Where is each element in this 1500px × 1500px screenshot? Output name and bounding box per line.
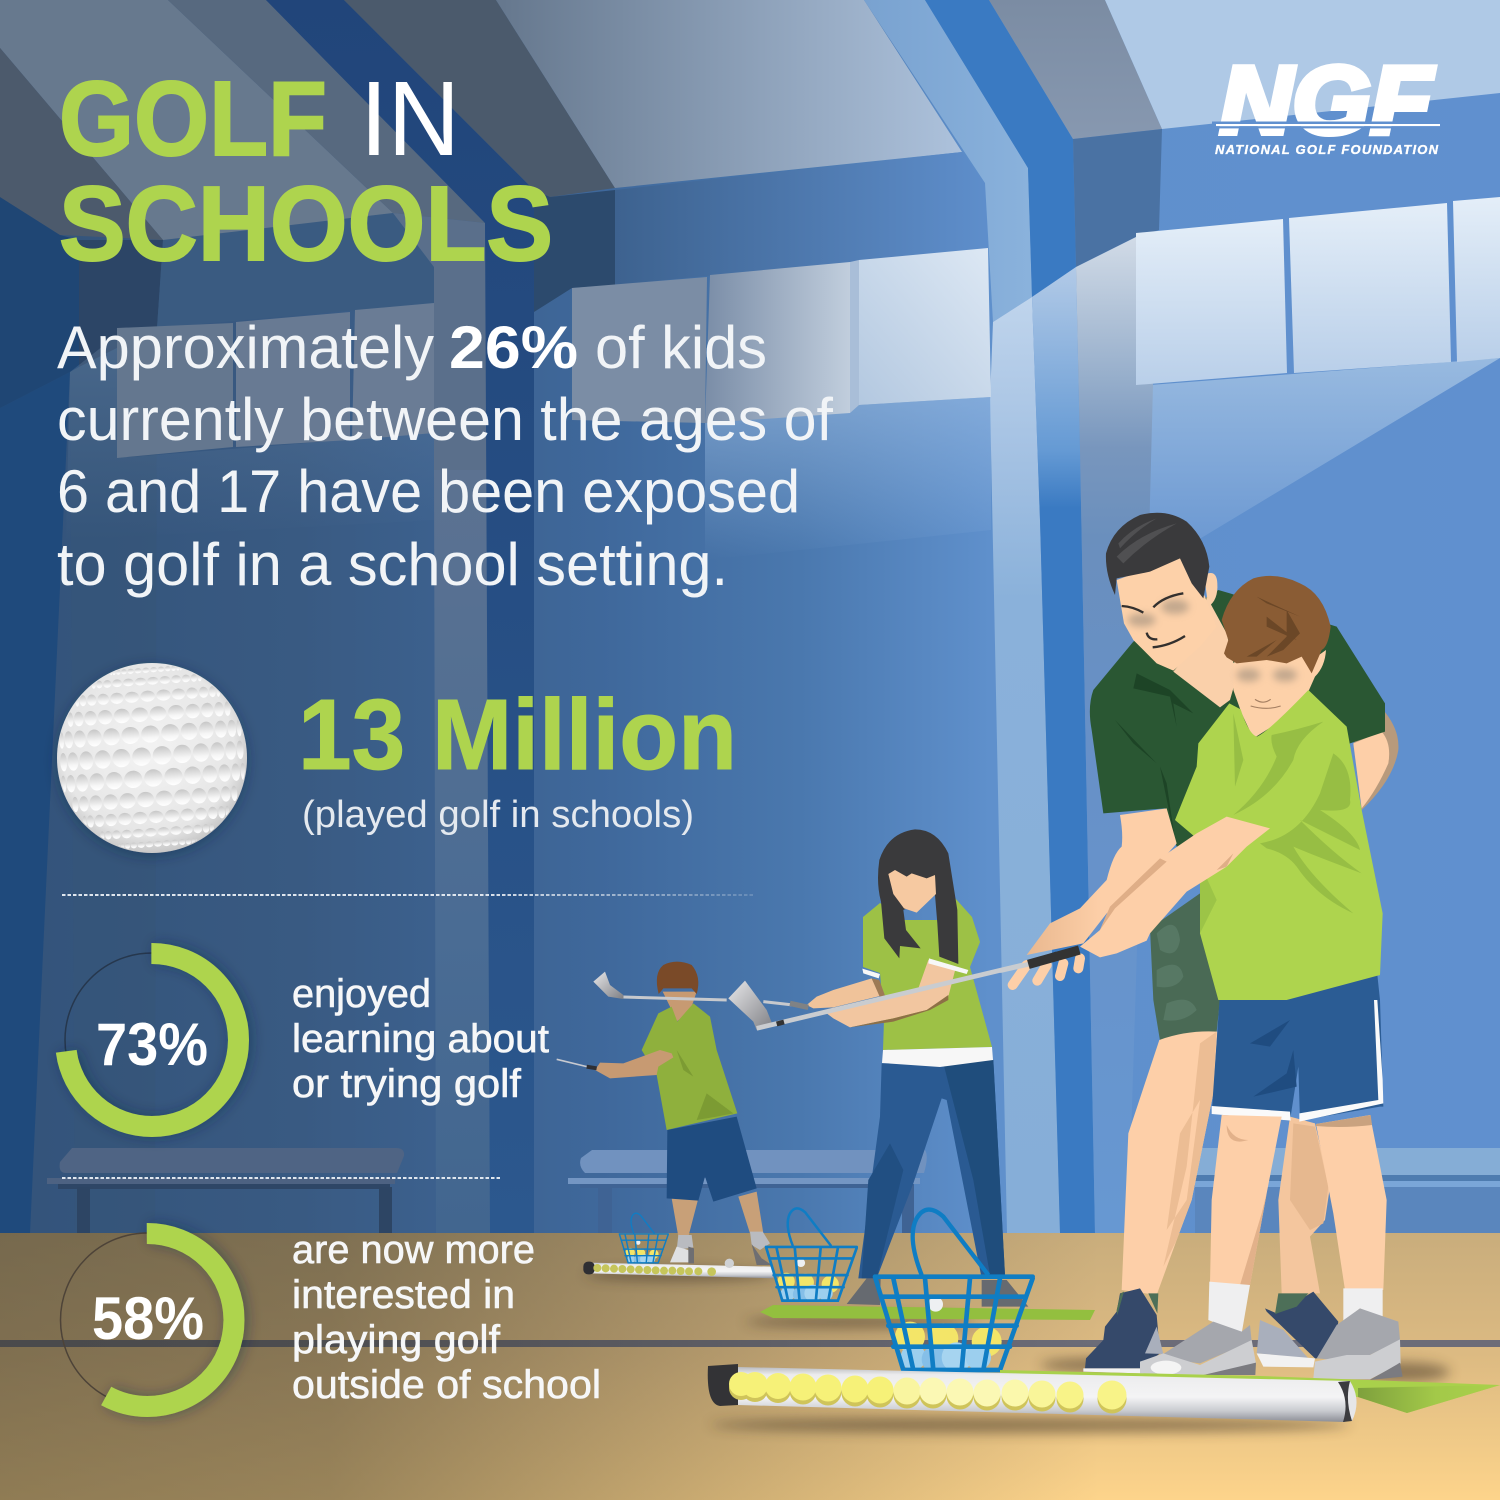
figure: small boy in the background: [557, 962, 772, 1265]
text: enjoyed learning: [292, 972, 549, 1106]
intro text block: Approximately: [57, 314, 434, 381]
boy front sock and shoe: [1208, 1282, 1250, 1333]
boy back sock and shoe: [1343, 1288, 1383, 1322]
girl near arm: [827, 960, 955, 1027]
divider: dotted line lower: [62, 1177, 500, 1179]
coach right shoe: [1265, 1292, 1338, 1358]
stat: 13 Million: (played golf in schools): [302, 794, 694, 836]
background: skylight windows: [66, 197, 1500, 560]
small tube of range balls: [583, 1259, 773, 1278]
small boy shorts: [667, 1117, 757, 1202]
boy neck and face: [1233, 647, 1326, 738]
girl hair: [807, 829, 968, 1027]
coach face: [1117, 557, 1217, 671]
boy shirt: [1175, 690, 1383, 1000]
donut chart: 58%: 58%: [92, 1285, 204, 1352]
bench: middle: [568, 1150, 927, 1233]
text: more interested: outside of school: [292, 1363, 601, 1407]
clubs: [593, 954, 1057, 1030]
small boy club shaft: [557, 1059, 588, 1067]
small boy arms and grip: [595, 1050, 673, 1078]
boy shorts: [1212, 968, 1383, 1121]
girl sleeve: [862, 969, 880, 978]
title: IN: [360, 60, 460, 178]
small boy neck and head: [663, 992, 697, 1022]
icon: golf ball: [53, 661, 250, 853]
logo: NGF: NGF: [1220, 47, 1434, 154]
foreground ball tube: [708, 1364, 1357, 1422]
intro text block: of kids: [595, 314, 767, 381]
coach shorts: [1150, 893, 1220, 1041]
floor shadows: [585, 1269, 1450, 1433]
girl jeans: [847, 1060, 1028, 1307]
girl near sleeve: [928, 958, 968, 974]
coach neck: [1173, 597, 1237, 707]
text: enjoyed learning: or trying golf: [292, 1062, 522, 1106]
boy eyes shadow: [1236, 668, 1297, 682]
logo: NGF: NATIONAL GOLF FOUNDATION: [1215, 142, 1439, 157]
girl face: [888, 870, 936, 913]
donut chart: 73%: 73%: [96, 1011, 208, 1078]
small boy hair: [657, 962, 698, 994]
coach ear: [1204, 573, 1217, 607]
coach left shoe: [1085, 1288, 1160, 1368]
coach far arm: [1353, 710, 1398, 810]
coach brows, nose and mouth: [1122, 593, 1185, 647]
title: [59, 60, 553, 283]
boy back leg: [1316, 1115, 1387, 1290]
intro text block: 6 and 17 have been exposed: [57, 458, 800, 525]
intro text block: [57, 314, 833, 598]
divider: dotted line: [62, 894, 755, 896]
boy front leg: [1210, 1115, 1282, 1285]
donut chart: 73%: [65, 953, 239, 1127]
coach forearm: [1027, 808, 1177, 955]
girl far arm: [807, 978, 880, 1008]
girl shirt white band: [882, 1047, 993, 1067]
coach eyes shadow: [1128, 599, 1189, 627]
donut chart: 58%: [60, 1233, 234, 1407]
stat: 13 Million: 13 Million: [298, 679, 737, 791]
coach fingers: [1013, 958, 1080, 985]
bench: right: [1195, 1148, 1500, 1233]
grip and shaft: [1000, 964, 1028, 971]
bench: left: [47, 1148, 404, 1233]
coach right leg: [1278, 1117, 1330, 1293]
floor: [0, 1233, 1500, 1500]
figure: coach: [1083, 513, 1403, 1380]
text: more interested: playing golf: [292, 1318, 501, 1362]
stat: 13 Million: [298, 679, 737, 836]
text: enjoyed learning: enjoyed: [292, 972, 431, 1016]
icon: medium ball basket: [766, 1208, 857, 1302]
figure: boy upper body: [1000, 576, 1383, 1000]
boy forearm: [1080, 817, 1270, 957]
figure: girl golfer: [807, 829, 1028, 1307]
boy nose and mouth: [1251, 699, 1281, 708]
icon: large ball basket: [875, 1210, 1033, 1373]
foreground mat: [1000, 1370, 1500, 1413]
small boy shirt: [642, 1003, 737, 1130]
boy shirt folds: [1233, 713, 1362, 913]
girl shirt: [863, 898, 992, 1050]
mat under girl: [760, 1305, 1095, 1320]
text: more interested: [292, 1228, 601, 1407]
intro text block: currently between the ages of: [57, 386, 833, 453]
coach left leg: [1122, 1031, 1217, 1295]
small boy iron: [593, 972, 808, 1007]
small boy socks and shoes: [677, 1232, 770, 1250]
girl iron head: [728, 954, 1057, 1030]
title: GOLF: [59, 60, 327, 178]
intro text block: 26%: [449, 314, 578, 381]
text: more interested: interested in: [292, 1273, 515, 1317]
small boy legs: [672, 1192, 763, 1237]
intro text block: to golf in a school setting.: [57, 531, 728, 598]
text: enjoyed learning: learning about: [292, 1017, 549, 1061]
title: SCHOOLS: [59, 165, 553, 283]
coach shirt: [1090, 590, 1385, 847]
icon: small ball basket: [619, 1213, 668, 1264]
coach hair: [1106, 513, 1209, 598]
text: more interested: are now more: [292, 1228, 535, 1272]
boy hair: [1222, 576, 1331, 673]
